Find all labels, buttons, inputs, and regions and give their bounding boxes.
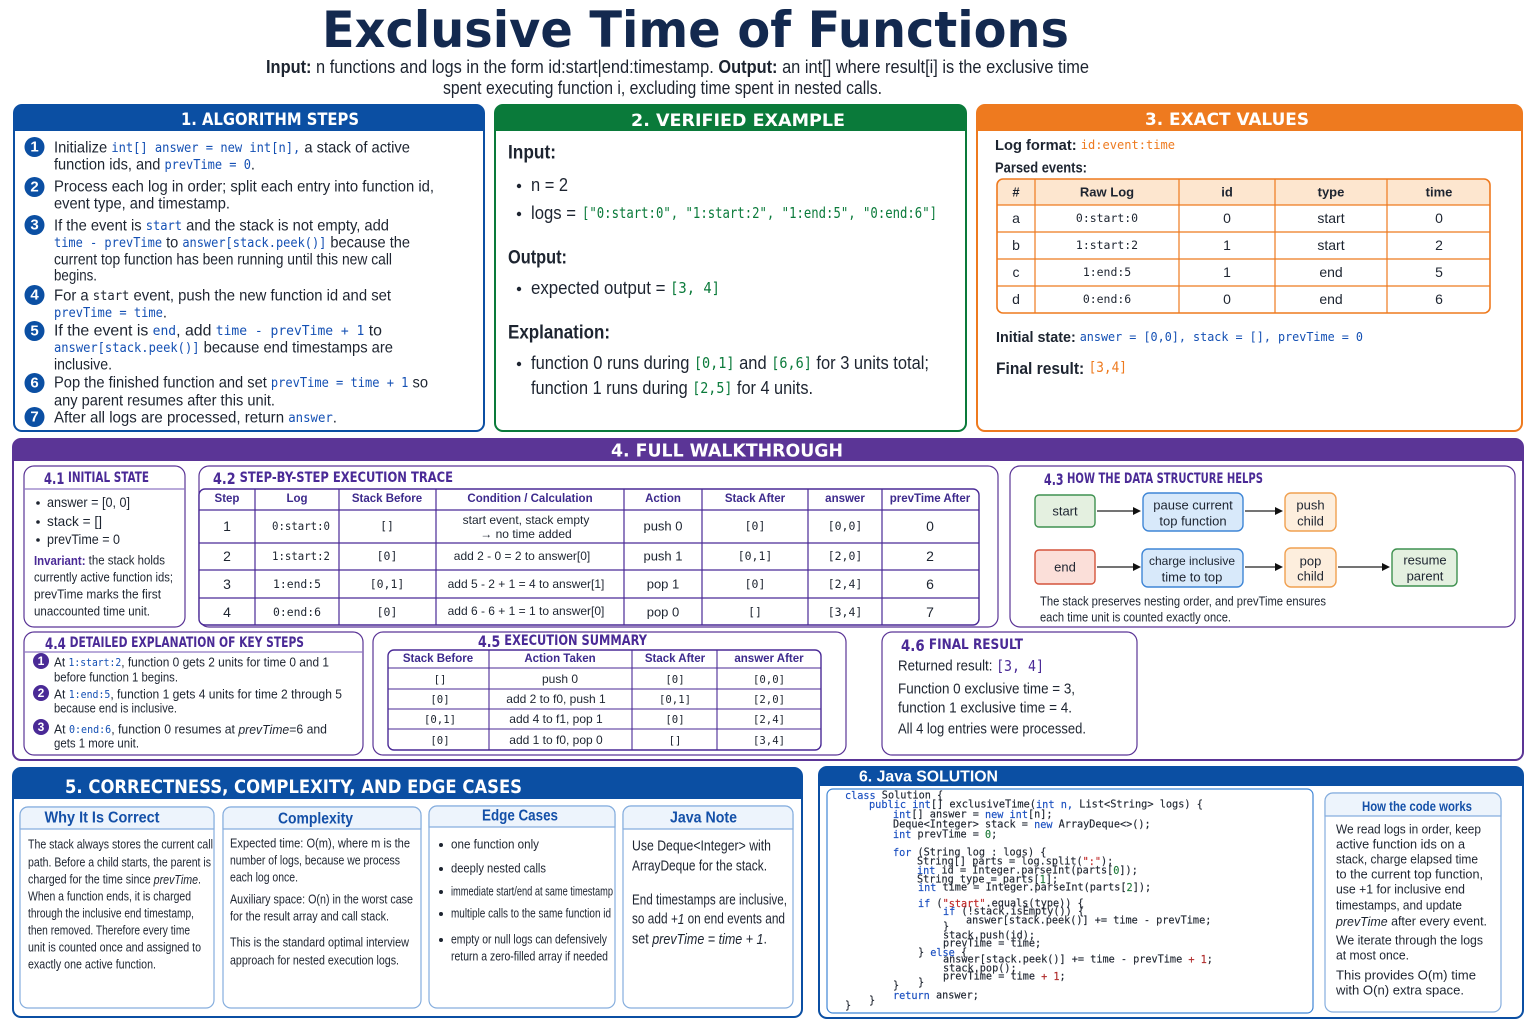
table: parsed events: start (1317, 237, 1345, 253)
table: execution trace: add 5 - 2 + 1 = 4 to answer[1] (448, 577, 604, 591)
step 1: 1 (30, 138, 39, 156)
card: why it is correct: Why It Is Correct (44, 810, 160, 826)
card 4.5 execution summary (373, 632, 846, 755)
flow: start: top function (1159, 514, 1227, 528)
table: execution summary: [0,1] (424, 712, 456, 726)
card: how the code works: We read logs in order, keep (1336, 822, 1481, 836)
card 4.4 key steps: gets 1 more unit. (54, 736, 139, 750)
card 4.4 key steps: At 1:start:2, function 0 gets 2 units for time 0 and 1 (54, 654, 329, 670)
input block: logs = (531, 203, 576, 223)
table: parsed events: b (1012, 237, 1020, 253)
card: edge cases: empty or null logs can defensively (451, 932, 607, 946)
card: complexity: Auxiliary space: O(n) in the worst case (230, 892, 413, 906)
table: execution summary: push 0 (542, 672, 578, 686)
step 6: Pop the finished function and set prevTime = time + 1 so (54, 374, 428, 392)
flow: end: charge inclusive (1149, 554, 1235, 568)
flow: start: start (1052, 504, 1078, 518)
table: execution trace: Condition / Calculation (467, 493, 593, 505)
table: execution trace: [0] (745, 519, 765, 533)
table: execution summary: [0] (665, 672, 685, 686)
flow: end: pop (1300, 554, 1321, 568)
code block: if ("start".equals(type)) { (918, 898, 1084, 910)
table: execution summary: [0] (665, 712, 685, 726)
table: execution trace: [0] (377, 605, 397, 619)
table: execution trace: [2,4] (828, 577, 862, 591)
card: how the code works: with O(n) extra space. (1335, 982, 1464, 998)
card: edge cases: Edge Cases (482, 808, 558, 824)
table: parsed events: 0:end:6 (1083, 292, 1131, 306)
table: parsed events: 0 (1223, 291, 1231, 307)
flow: end: end (1054, 560, 1076, 574)
table: parsed events: time (1426, 184, 1452, 200)
initial state: Initial state: answer = [0,0], stack = [], prevTime = 0 (996, 328, 1363, 346)
card: edge cases: deeply nested calls (451, 860, 546, 876)
table: execution trace: Action (645, 493, 681, 505)
card: complexity: number of logs, because we process (230, 852, 400, 868)
card: complexity: each log once. (230, 870, 298, 884)
panel: java solution (819, 767, 1523, 1018)
table: execution trace: [] (380, 519, 394, 533)
subtitle: Input: n functions and logs in the form id:start|end:timestamp. Output: an int[] where result[i] is the exclusive time (266, 57, 1089, 77)
table: execution summary (388, 650, 821, 750)
card 4.1 initial state: prevTime = 0 (47, 531, 120, 547)
card: why it is correct: through the inclusive end timestamp, (28, 906, 194, 920)
card 4.6 final result: Returned result: [3, 4] (898, 657, 1044, 675)
flow: end: child (1297, 568, 1324, 584)
title: Exclusive Time of Functions (322, 1, 1069, 59)
table: execution trace: Stack After (725, 493, 786, 505)
card: edge cases: return a zero-filled array if needed (451, 948, 608, 964)
panel: verified example (495, 105, 966, 431)
step 2: event type, and timestamp. (54, 196, 230, 212)
table: parsed events: # (1012, 184, 1020, 200)
code block: } (893, 980, 899, 992)
card: java note: Use Deque<Integer> with (632, 838, 771, 854)
table: execution trace: [2,0] (828, 549, 862, 563)
subtitle (266, 57, 1089, 98)
card 4.1 initial state: currently active function ids; (34, 570, 173, 584)
explanation block: Explanation: (508, 322, 610, 344)
step 1: function ids, and prevTime = 0. (54, 156, 255, 174)
card 4.4 key steps: At 0:end:6, function 0 resumes at prevTime=6 and (54, 722, 327, 736)
step 7: After all logs are processed, return answer. (54, 410, 337, 426)
table: execution summary: add 1 to f0, pop 0 (509, 733, 603, 747)
card: how the code works: We iterate through the logs (1336, 932, 1483, 948)
table: execution summary: [2,0] (753, 692, 785, 706)
step 4 (24, 285, 392, 322)
table: execution trace: 1:end:5 (273, 577, 321, 591)
table: execution trace: [0,1] (738, 549, 772, 563)
card 4.3 data structure flow: each time unit is counted exactly once. (1040, 610, 1231, 624)
table: parsed events: 1:end:5 (1083, 265, 1131, 279)
card: edge cases: immediate start/end at same timestamp (451, 884, 613, 898)
card: why it is correct: The stack always stores the current call (28, 836, 213, 852)
final result: Final result: [3,4] (996, 358, 1127, 378)
table: parsed events: 6 (1435, 291, 1443, 307)
input block: ["0:start:0", "1:start:2", "1:end:5", "0:end:6"] (582, 204, 937, 222)
card 4.1 initial state: prevTime marks the first (34, 586, 161, 602)
table: parsed events: a (1012, 210, 1020, 226)
table: parsed events (997, 179, 1490, 313)
input block: n = 2 (531, 175, 568, 195)
note: The stack preserves nesting order, and prevTime ensures (1040, 594, 1326, 608)
flow: start: pause current (1153, 498, 1233, 512)
table: execution summary: Stack After (645, 653, 706, 665)
heading: correctness: 5. CORRECTNESS, COMPLEXITY, AND EDGE CASES (65, 776, 522, 798)
table: parsed events: 5 (1435, 264, 1443, 280)
code block: stack.push(id); (943, 930, 1035, 942)
card 4.4 key steps: 3 (38, 720, 45, 734)
step 1: Initialize int[] answer = new int[n], a stack of active (54, 140, 410, 156)
card: why it is correct: exactly one active function. (28, 956, 156, 972)
card 4.6 final result: All 4 log entries were processed. (898, 720, 1086, 738)
card 4.4 key steps: 1 (38, 654, 45, 668)
code block: } (845, 1000, 851, 1012)
table: parsed events: 1:start:2 (1076, 238, 1138, 252)
card: how the code works (1325, 793, 1501, 1012)
table: execution trace: [0,1] (370, 577, 404, 591)
table: execution trace (199, 489, 979, 625)
card 4.6 final result: 4.6 FINAL RESULT (901, 636, 1023, 654)
card: why it is correct (20, 807, 214, 1008)
explanation block: function 0 runs during [0,1] and [6,6] for 3 units total; (531, 353, 929, 373)
code block: int[] answer = new int[n]; (893, 810, 1052, 820)
step 3 (24, 215, 410, 284)
flow: end: time to top (1162, 570, 1222, 584)
card: how the code works: prevTime after every event. (1335, 914, 1487, 928)
step 3: time - prevTime to answer[stack.peek()] because the (54, 234, 410, 252)
table: execution summary: add 4 to f1, pop 1 (509, 712, 603, 726)
code block: prevTime = time + 1; (943, 972, 1066, 982)
table: execution trace: add 6 - 6 + 1 = 1 to answer[0] (448, 604, 604, 618)
table: execution trace: 4 (223, 604, 231, 620)
card: complexity: This is the standard optimal interview (230, 934, 410, 950)
table: parsed events: d (1012, 291, 1020, 307)
table: parsed events: Raw Log (1080, 184, 1134, 200)
card 4.4 key steps: At 1:end:5, function 1 gets 4 units for time 2 through 5 (54, 686, 342, 702)
table: execution trace: → no time added (480, 527, 572, 541)
code block: } (869, 996, 875, 1006)
step 5: answer[stack.peek()] because end timestamps are (54, 340, 393, 356)
table: execution trace: 2 (926, 548, 934, 564)
card: edge cases: multiple calls to the same function id (451, 906, 611, 920)
heading: verified example: 2. VERIFIED EXAMPLE (631, 111, 845, 131)
code block: if (!stack.isEmpty()) { (943, 906, 1084, 918)
code block: for (String log : logs) { (893, 848, 1046, 858)
code block: Deque<Integer> stack = new ArrayDeque<>(); (893, 820, 1151, 830)
table: execution trace: 1 (223, 518, 231, 534)
flow: end: resume (1403, 552, 1447, 568)
table: execution trace: 1:start:2 (272, 549, 330, 563)
panel: full walkthrough (13, 439, 1523, 760)
card 4.4 key steps (24, 632, 363, 755)
card: how the code works: This provides O(m) time (1336, 968, 1476, 982)
table: execution summary: answer After (734, 653, 804, 665)
table: parsed events: 2 (1435, 237, 1443, 253)
flow: start: push (1296, 498, 1325, 512)
step 4: prevTime = time. (54, 304, 167, 322)
step 3: If the event is start and the stack is not empty, add (54, 218, 389, 234)
table: execution trace: Stack Before (352, 493, 422, 505)
card: java note: End timestamps are inclusive, (632, 892, 787, 908)
table: parsed events: end (1319, 291, 1343, 307)
flow: end (1035, 548, 1457, 587)
card 4.2 execution trace: 4.2 STEP-BY-STEP EXECUTION TRACE (213, 468, 453, 488)
code block: int id = Integer.parseInt(parts[0]); (917, 866, 1138, 876)
code block: class Solution { (845, 790, 943, 802)
table: execution trace: [] (748, 605, 762, 619)
card: complexity: approach for nested execution logs. (230, 952, 399, 968)
table: execution trace: [0] (745, 577, 765, 591)
output block (508, 248, 720, 298)
card 4.2 execution trace (199, 466, 998, 627)
table: parsed events: c (1012, 264, 1020, 280)
card 4.4 key steps: before function 1 begins. (54, 670, 178, 684)
table: parsed events: end (1319, 264, 1343, 280)
code block: answer[stack.peek()] += time - prevTime; (966, 916, 1211, 926)
card 4.4 key steps: 4.4 DETAILED EXPLANATION OF KEY STEPS (45, 634, 304, 652)
table: execution summary: [] (669, 734, 681, 746)
card: why it is correct: When a function ends, it is charged (28, 888, 191, 904)
step 2 (24, 177, 434, 212)
table: execution trace: push 1 (643, 548, 683, 564)
table: execution summary: [2,4] (753, 712, 785, 726)
code block: public int[] exclusiveTime(int n, List<String> logs) { (869, 800, 1203, 810)
code block (827, 789, 1313, 1013)
card: edge cases: one function only (451, 836, 539, 852)
code block: answer[stack.peek()] += time - prevTime + 1; (943, 954, 1213, 966)
input block: Input: (508, 142, 556, 164)
card: edge cases (429, 806, 615, 1008)
table: execution summary: [0] (430, 692, 450, 706)
card: java note: Java Note (670, 810, 737, 826)
table: execution summary: add 2 to f0, push 1 (506, 692, 606, 706)
table: execution trace: answer (825, 493, 865, 505)
card 4.1 initial state: Invariant: the stack holds (34, 552, 165, 568)
table: execution trace: [0] (377, 549, 397, 563)
table: execution trace: 0 (926, 518, 934, 534)
heading: algorithm steps: 1. ALGORITHM STEPS (181, 110, 359, 130)
step 7: 7 (30, 408, 39, 426)
step 2: Process each log in order; split each entry into function id, (54, 178, 434, 196)
heading: java solution: 6. Java SOLUTION (859, 768, 998, 786)
step 2: 2 (30, 178, 39, 196)
table: execution trace: 3 (223, 576, 231, 592)
output block: Output: (508, 248, 567, 268)
card: how the code works: timestamps, and update (1336, 898, 1462, 912)
card: how the code works: stack, charge elapsed time (1336, 852, 1478, 866)
table: parsed events: start (1317, 210, 1345, 226)
flow: start: child (1297, 514, 1324, 528)
card: java note (623, 806, 793, 1008)
card: complexity: for the result array and call stack. (230, 908, 389, 924)
code block: stack.pop(); (943, 964, 1017, 974)
card 4.1 initial state: answer = [0, 0] (47, 494, 130, 510)
table: execution trace: Step (215, 493, 239, 505)
card 4.4 key steps: 2 (38, 686, 45, 700)
explanation block: function 1 runs during [2,5] for 4 units. (531, 378, 813, 398)
table: execution summary: Stack Before (403, 653, 473, 665)
flow: end: parent (1407, 568, 1444, 584)
card: complexity (223, 807, 421, 1008)
code block: return answer; (893, 990, 979, 1002)
step 4: 4 (30, 286, 39, 304)
code block: } (943, 922, 949, 932)
table: execution summary: [] (434, 672, 446, 686)
code block: String[] parts = log.split(":"); (917, 856, 1113, 868)
table: parsed events: id (1221, 184, 1233, 200)
panel: exact values (977, 105, 1522, 431)
card: how the code works: active function ids on a (1336, 836, 1466, 852)
table: execution summary: [3,4] (753, 734, 785, 746)
card 4.1 initial state: stack = [] (47, 513, 102, 529)
table: execution trace: 2 (223, 548, 231, 564)
table: execution trace: 6 (926, 576, 934, 592)
card 4.5 execution summary: 4.5 EXECUTION SUMMARY (478, 632, 647, 650)
heading: full walkthrough: 4. FULL WALKTHROUGH (611, 440, 843, 462)
table: execution trace: [0,0] (828, 519, 862, 533)
card 4.4 key steps: because end is inclusive. (54, 700, 177, 716)
table: execution trace: Log (286, 493, 308, 505)
table: execution trace: pop 0 (647, 604, 679, 620)
table: execution trace: 0:start:0 (272, 519, 330, 533)
panel: algorithm steps (14, 105, 484, 431)
card: how the code works: use +1 for inclusive end (1336, 882, 1465, 896)
step 5: 5 (30, 322, 39, 340)
card: why it is correct: unit is counted once and assigned to (28, 940, 201, 954)
table: execution trace: prevTime After (890, 493, 971, 505)
code block: } else { (918, 948, 967, 958)
table: execution summary: [0,0] (753, 672, 785, 686)
table: execution trace: [3,4] (828, 605, 862, 619)
table: execution trace: start event, stack empty (463, 513, 589, 527)
panel: correctness, complexity, edge cases (13, 768, 802, 1017)
heading: exact values: 3. EXACT VALUES (1145, 110, 1309, 130)
table: parsed events: type (1318, 184, 1344, 200)
card 4.6 final result: Function 0 exclusive time = 3, (898, 680, 1075, 698)
card: why it is correct: then removed. Therefore every time (28, 922, 190, 938)
card: complexity: Expected time: O(m), where m is the (230, 836, 410, 850)
card: complexity: Complexity (278, 810, 353, 828)
step 6 (24, 373, 428, 410)
step 5: If the event is end, add time - prevTime + 1 to (54, 322, 382, 340)
step 3: 3 (30, 216, 39, 234)
card 4.1 initial state: unaccounted time unit. (34, 604, 150, 618)
subtitle: spent executing function i, excluding time spent in nested calls. (443, 78, 882, 98)
table: parsed events: 0 (1223, 210, 1231, 226)
card: java note: set prevTime = time + 1. (632, 930, 767, 948)
code block: prevTime = time; (943, 938, 1041, 950)
card 4.3 data structure flow (1010, 466, 1515, 627)
card 4.6 final result: function 1 exclusive time = 4. (898, 700, 1072, 716)
output block: expected output = [3, 4] (531, 278, 720, 298)
card 4.1 initial state: 4.1 INITIAL STATE (44, 468, 149, 488)
step 5 (24, 321, 393, 374)
table: execution trace: 0:end:6 (273, 605, 321, 619)
table: parsed events: 0:start:0 (1076, 211, 1138, 225)
step 3: current top function has been running until this new call (54, 252, 392, 268)
step 1 (24, 137, 410, 174)
step 5: inclusive. (54, 356, 112, 374)
table: parsed events: 1 (1223, 264, 1231, 280)
card 4.1 initial state (24, 466, 185, 627)
card: java note: so add +1 on end events and (632, 910, 785, 928)
table: execution trace: 7 (926, 604, 934, 620)
explanation block (508, 322, 929, 398)
log format: Log format: id:event:time (995, 136, 1175, 154)
code block: } (918, 978, 924, 988)
card: how the code works: How the code works (1362, 798, 1472, 814)
parsed events label: Parsed events: (995, 160, 1087, 176)
table: execution trace: push 0 (643, 518, 683, 534)
table: execution summary: Action Taken (524, 653, 596, 665)
card: how the code works: to the current top function, (1336, 866, 1483, 882)
code block: String type = parts[1]; (917, 874, 1058, 886)
card: how the code works: at most once. (1336, 948, 1409, 962)
card: why it is correct: path. Before a child starts, the parent is (28, 854, 211, 870)
step 4: For a start event, push the new function id and set (54, 288, 392, 304)
table: execution summary: [0] (430, 734, 450, 746)
card 4.3 data structure flow: 4.3 HOW THE DATA STRUCTURE HELPS (1044, 470, 1263, 488)
step 3: begins. (54, 268, 97, 284)
code block: int time = Integer.parseInt(parts[2]); (918, 882, 1151, 894)
table: parsed events: 1 (1223, 237, 1231, 253)
card 4.6 final result (882, 632, 1137, 755)
step 6: any parent resumes after this unit. (54, 392, 275, 410)
card: why it is correct: charged for the time since prevTime. (28, 872, 201, 886)
card: java note: ArrayDeque for the stack. (632, 858, 767, 874)
code block: int prevTime = 0; (893, 830, 997, 840)
step 6: 6 (30, 374, 39, 392)
table: execution trace: add 2 - 0 = 2 to answer[0] (454, 549, 590, 563)
flow: start (1035, 493, 1336, 531)
table: parsed events: 0 (1435, 210, 1443, 226)
input block (508, 142, 937, 223)
table: execution summary: [0,1] (659, 692, 691, 706)
table: execution trace: pop 1 (647, 576, 679, 592)
